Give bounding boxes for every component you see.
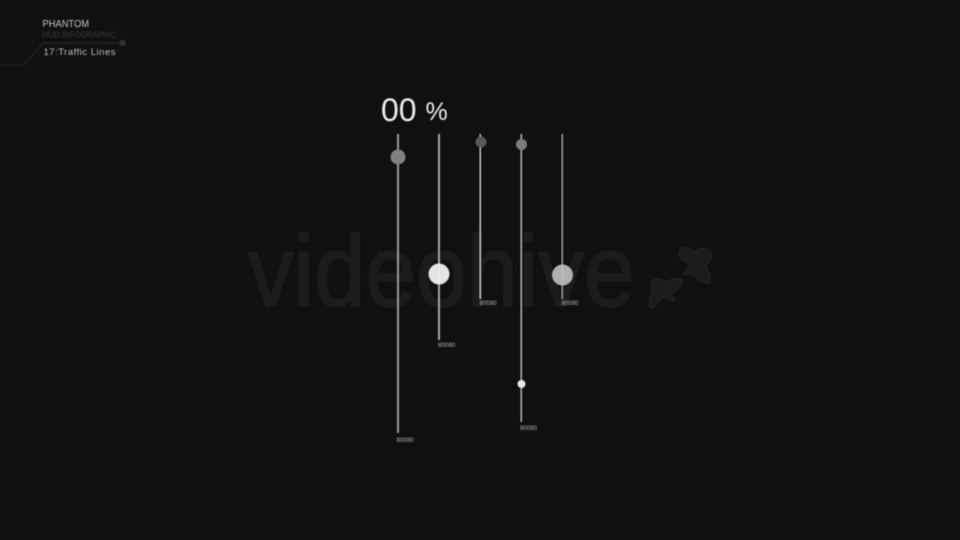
traffic line 2: [428, 134, 456, 349]
traffic line 3: [476, 134, 497, 307]
connector line with node: [0, 40, 126, 65]
traffic line 4: [516, 134, 538, 432]
traffic line 3: 80080: [480, 301, 497, 307]
traffic line 5: [552, 134, 579, 307]
traffic line 1: [390, 134, 414, 444]
percentage counter: 00: [381, 92, 417, 128]
traffic line 1: 80080: [396, 438, 414, 444]
traffic line 2: 80080: [438, 343, 456, 349]
title block: [0, 19, 126, 65]
traffic line 4: 80080: [520, 426, 538, 432]
traffic line 5: 80080: [562, 301, 579, 307]
subtitle: HUD.INFOGRAPHIC: HUD.INFOGRAPHIC: [42, 30, 116, 40]
icon: watermark leaf logo: [649, 247, 711, 308]
percentage counter: [381, 92, 448, 128]
percentage counter: %: [426, 98, 448, 126]
title: PHANTOM: PHANTOM: [42, 19, 89, 30]
subtitle: 17:Traffic Lines: 17:Traffic Lines: [44, 47, 116, 58]
watermark: videohive wordmark: videohive: [248, 216, 635, 328]
